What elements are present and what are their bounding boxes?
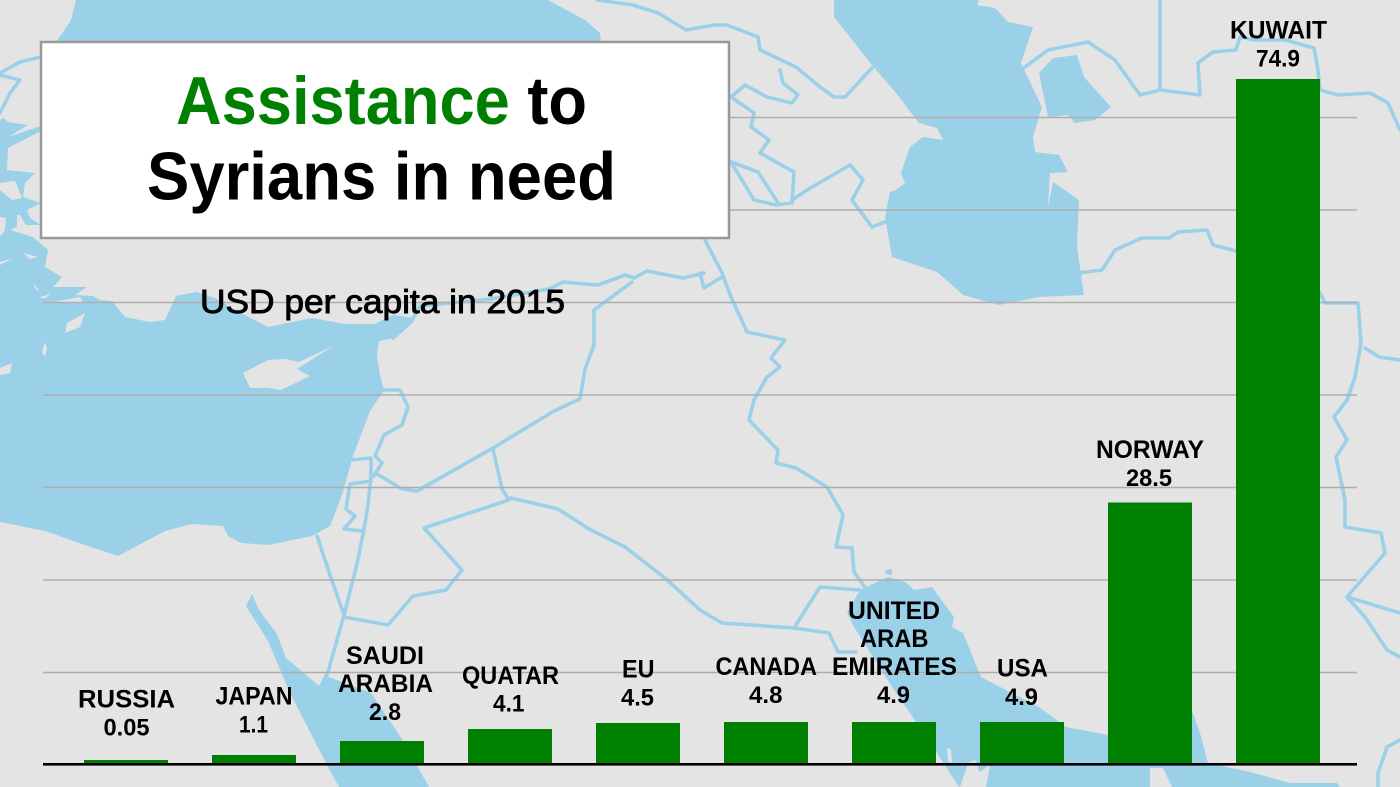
bar: EU — [596, 723, 680, 764]
bar: Quatar — [468, 729, 552, 764]
label: Japan 1.1: JAPAN — [216, 682, 292, 710]
label: EU 4.5: 4.5 — [621, 684, 654, 712]
label: Japan 1.1 — [216, 682, 292, 738]
label: Saudi Arabia 2.8: 2.8 — [369, 699, 401, 726]
label: Norway 28.5: 28.5 — [1126, 465, 1172, 492]
label: Kuwait 74.9: 74.9 — [1256, 46, 1300, 72]
land: Aegean islands and peninsulas — [0, 181, 85, 375]
label: United Arab Emirates 4.9: 4.9 — [877, 682, 910, 709]
bar: Japan — [212, 755, 296, 764]
title line 2: Syrians in need — [147, 138, 616, 214]
label: USA 4.9: 4.9 — [1005, 684, 1038, 711]
bar: Kuwait — [1236, 79, 1320, 764]
label: USA 4.9 — [997, 654, 1048, 711]
bar: Saudi Arabia — [340, 741, 424, 764]
label: Kuwait 74.9: KUWAIT — [1230, 16, 1327, 44]
water: Mediterranean Sea — [0, 118, 413, 556]
label: Quatar 4.1 — [462, 662, 559, 718]
bar: Canada — [724, 722, 808, 764]
label: Canada 4.8 — [716, 653, 817, 709]
bar: Norway — [1108, 502, 1192, 764]
label: United Arab Emirates 4.9: ARAB — [860, 625, 928, 653]
label: Russia 0.05: 0.05 — [104, 714, 150, 742]
subtitle: USD per capita in 2015 — [200, 283, 565, 320]
label: EU 4.5 — [621, 656, 654, 712]
label: Saudi Arabia 2.8: ARABIA — [338, 670, 433, 698]
label: Quatar 4.1: QUATAR — [462, 662, 559, 690]
label: Canada 4.8: 4.8 — [749, 682, 782, 709]
water: Caspian Sea — [834, 0, 1084, 305]
chart gridlines — [43, 118, 1357, 672]
title line 1: Assistance to — [176, 63, 587, 139]
label: Canada 4.8: CANADA — [716, 653, 817, 681]
bar: United Arab Emirates — [852, 722, 936, 764]
label: Saudi Arabia 2.8: SAUDI — [346, 642, 424, 670]
label: United Arab Emirates 4.9: EMIRATES — [832, 653, 957, 681]
label: Russia 0.05 — [78, 686, 175, 742]
label: Norway 28.5 — [1096, 436, 1204, 492]
bar: Russia — [84, 760, 168, 764]
land: Qatar and Musandam — [947, 748, 1172, 787]
label: EU 4.5: EU — [622, 656, 654, 684]
label: Quatar 4.1: 4.1 — [493, 690, 524, 718]
water: Black Sea — [50, 0, 620, 70]
label: USA 4.9: USA — [997, 654, 1048, 682]
water: Red Sea — [246, 594, 429, 787]
water: Aral Sea — [1039, 55, 1111, 123]
title panel — [41, 42, 729, 238]
land: Cyprus — [243, 346, 333, 390]
label: Kuwait 74.9 — [1230, 16, 1327, 72]
axis baseline — [43, 763, 1357, 766]
label: United Arab Emirates 4.9: UNITED — [848, 597, 940, 625]
label: United Arab Emirates 4.9 — [832, 597, 957, 709]
label: Saudi Arabia 2.8 — [338, 642, 433, 726]
label: Japan 1.1: 1.1 — [239, 712, 268, 738]
label: Norway 28.5: NORWAY — [1096, 436, 1204, 464]
bar: USA — [980, 722, 1064, 764]
water: Persian Gulf and Gulf of Oman — [847, 569, 1340, 787]
label: Russia 0.05: RUSSIA — [78, 686, 175, 714]
